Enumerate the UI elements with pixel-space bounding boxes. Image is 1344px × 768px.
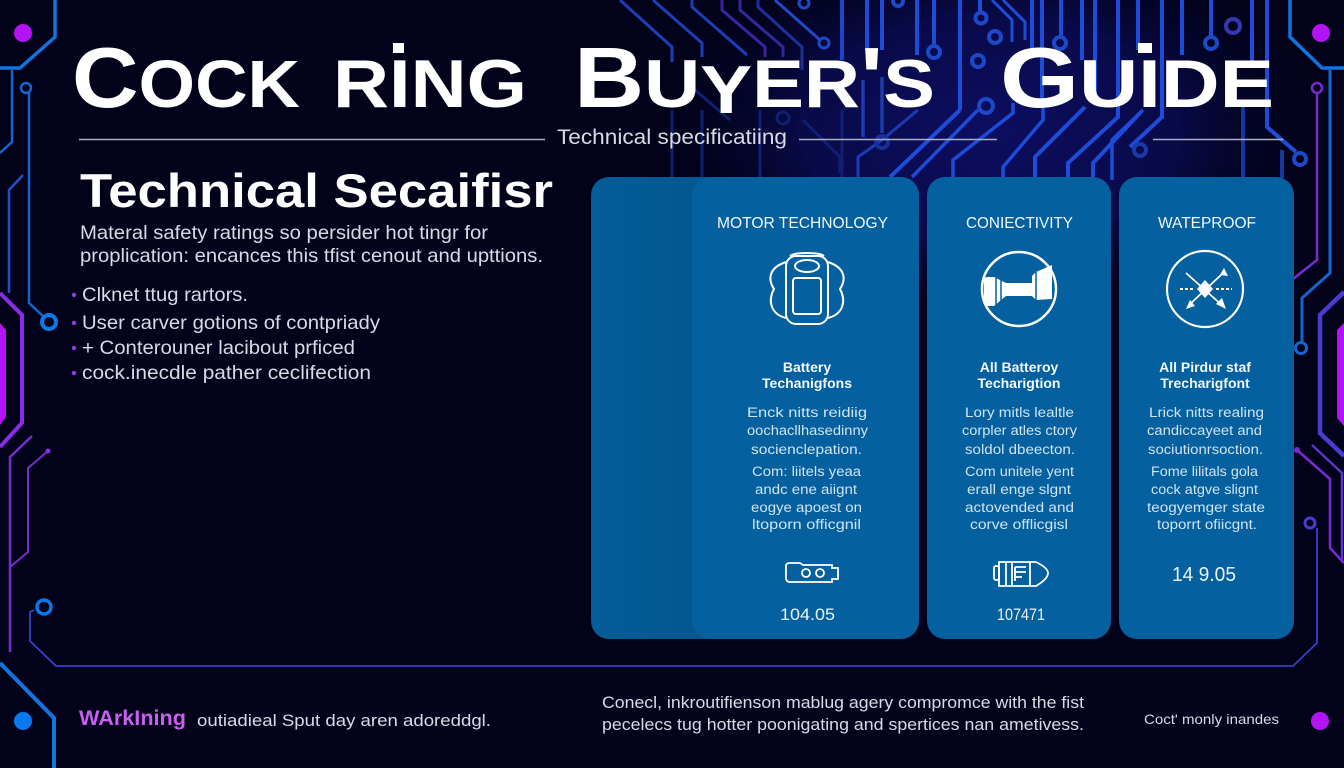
circuit frame: left xyxy=(0,0,56,768)
panel: connectivity: Techarigtion xyxy=(978,375,1060,391)
circuit traces: top left group xyxy=(620,0,842,180)
panel: back card xyxy=(591,177,731,639)
panel: waterproof: Fome lilitals gola xyxy=(1151,464,1259,479)
panel: connectivity: actovended and xyxy=(965,500,1074,515)
panel: motor technology: socienclepation. xyxy=(751,442,862,457)
bullet list xyxy=(72,284,380,384)
intro text: Materal safety ratings so persider hot tingr for xyxy=(80,222,489,244)
panel: motor technology: ltoporn officgnil xyxy=(752,517,861,532)
panel: motor technology: 104.05 xyxy=(780,605,835,624)
icon: connector in circle xyxy=(982,252,1056,326)
panel: waterproof: sociutionrsoction. xyxy=(1148,442,1263,457)
panel: connectivity: Com unitele yent xyxy=(965,464,1074,479)
panel: waterproof: Lrick nitts realing xyxy=(1149,405,1264,420)
panel: motor technology: Battery xyxy=(783,359,831,375)
footer: note: Conecl, inkroutifienson mablug agery compromce with the fist xyxy=(602,693,1084,712)
panel: connectivity: 107471 xyxy=(997,605,1045,624)
panel: waterproof: teogyemger state xyxy=(1147,500,1265,515)
footer: warning: outiadieal Sput day aren adoreddgl. xyxy=(197,711,491,730)
panel: motor technology: oochacllhasedinny xyxy=(747,423,868,438)
panel: waterproof: All Pirdur staf xyxy=(1159,359,1251,375)
panel: motor technology: eogye apoest on xyxy=(751,500,862,515)
icon: battery xyxy=(786,563,838,582)
circuit frame: bottom line xyxy=(30,528,1317,666)
panel: waterproof: candiccayeet and xyxy=(1147,423,1262,438)
panel: waterproof: Trecharigfont xyxy=(1160,375,1250,391)
panel: connectivity: Lory mitls lealtle xyxy=(965,405,1074,420)
bullet list: cock.inecdle pather ceclifection xyxy=(82,362,371,384)
panel: motor technology xyxy=(692,177,919,639)
title: 'S xyxy=(860,31,929,126)
panel: connectivity: corve offlicgisl xyxy=(970,517,1068,532)
section heading: Technical Secaifisr xyxy=(80,164,553,217)
panel: motor technology: Com: liitels yeaa xyxy=(752,464,862,479)
panel: waterproof: WATEPROOF xyxy=(1158,215,1256,232)
title xyxy=(72,31,1274,128)
bullet list: + Conterouner lacibout prficed xyxy=(82,337,355,359)
panel: motor technology: andc ene aiignt xyxy=(755,482,857,497)
intro text: proplication: encances this tfist cenout and upttions. xyxy=(80,245,543,267)
title: GUIDE xyxy=(1000,31,1274,126)
icon: motor cylinder xyxy=(770,253,844,324)
bullet list: Clknet ttug rartors. xyxy=(82,284,248,306)
panel: waterproof xyxy=(1119,177,1294,639)
title: RING xyxy=(333,46,527,122)
footer: warning xyxy=(79,707,491,730)
panel: motor technology: Enck nitts reidiig xyxy=(747,405,867,420)
panel: connectivity: CONIECTIVITY xyxy=(966,215,1073,232)
footer: note: pecelecs tug hotter poonigating and spertices nan ametivess. xyxy=(602,715,1084,734)
panel: connectivity: soldol dbeecton. xyxy=(965,442,1075,457)
title: Y xyxy=(700,52,752,128)
panel: connectivity: corpler atles ctory xyxy=(962,423,1077,438)
panel: motor technology: Techanigfons xyxy=(762,375,852,391)
spec number: 14 9.05 xyxy=(1172,564,1236,586)
title: ER xyxy=(752,46,860,122)
panel: connectivity xyxy=(927,177,1111,639)
footer: warning: WArkIning xyxy=(79,707,186,730)
panel: connectivity: All Batteroy xyxy=(980,359,1058,375)
panel: waterproof: cock atgve slignt xyxy=(1151,482,1258,497)
bullet list: User carver gotions of contpriady xyxy=(82,312,380,334)
panel: motor technology: MOTOR TECHNOLOGY xyxy=(717,215,888,232)
footer: note xyxy=(602,693,1084,734)
circuit nodes: top right xyxy=(777,0,1306,165)
panel: waterproof: toporrt ofiicgnt. xyxy=(1157,517,1257,532)
intro text xyxy=(80,222,543,267)
icon: crossed arrows in circle xyxy=(1167,251,1243,327)
circuit frame: right xyxy=(1290,0,1344,730)
icon: motor xyxy=(994,562,1048,586)
footer: credit: Coct' monly inandes xyxy=(1144,711,1279,727)
circuit traces: top centre xyxy=(858,0,1296,180)
subtitle with rules: Technical specificatiing xyxy=(557,126,787,149)
title: BU xyxy=(574,31,693,126)
panel: connectivity: erall enge slgnt xyxy=(967,482,1071,497)
title: COCK xyxy=(72,31,300,126)
